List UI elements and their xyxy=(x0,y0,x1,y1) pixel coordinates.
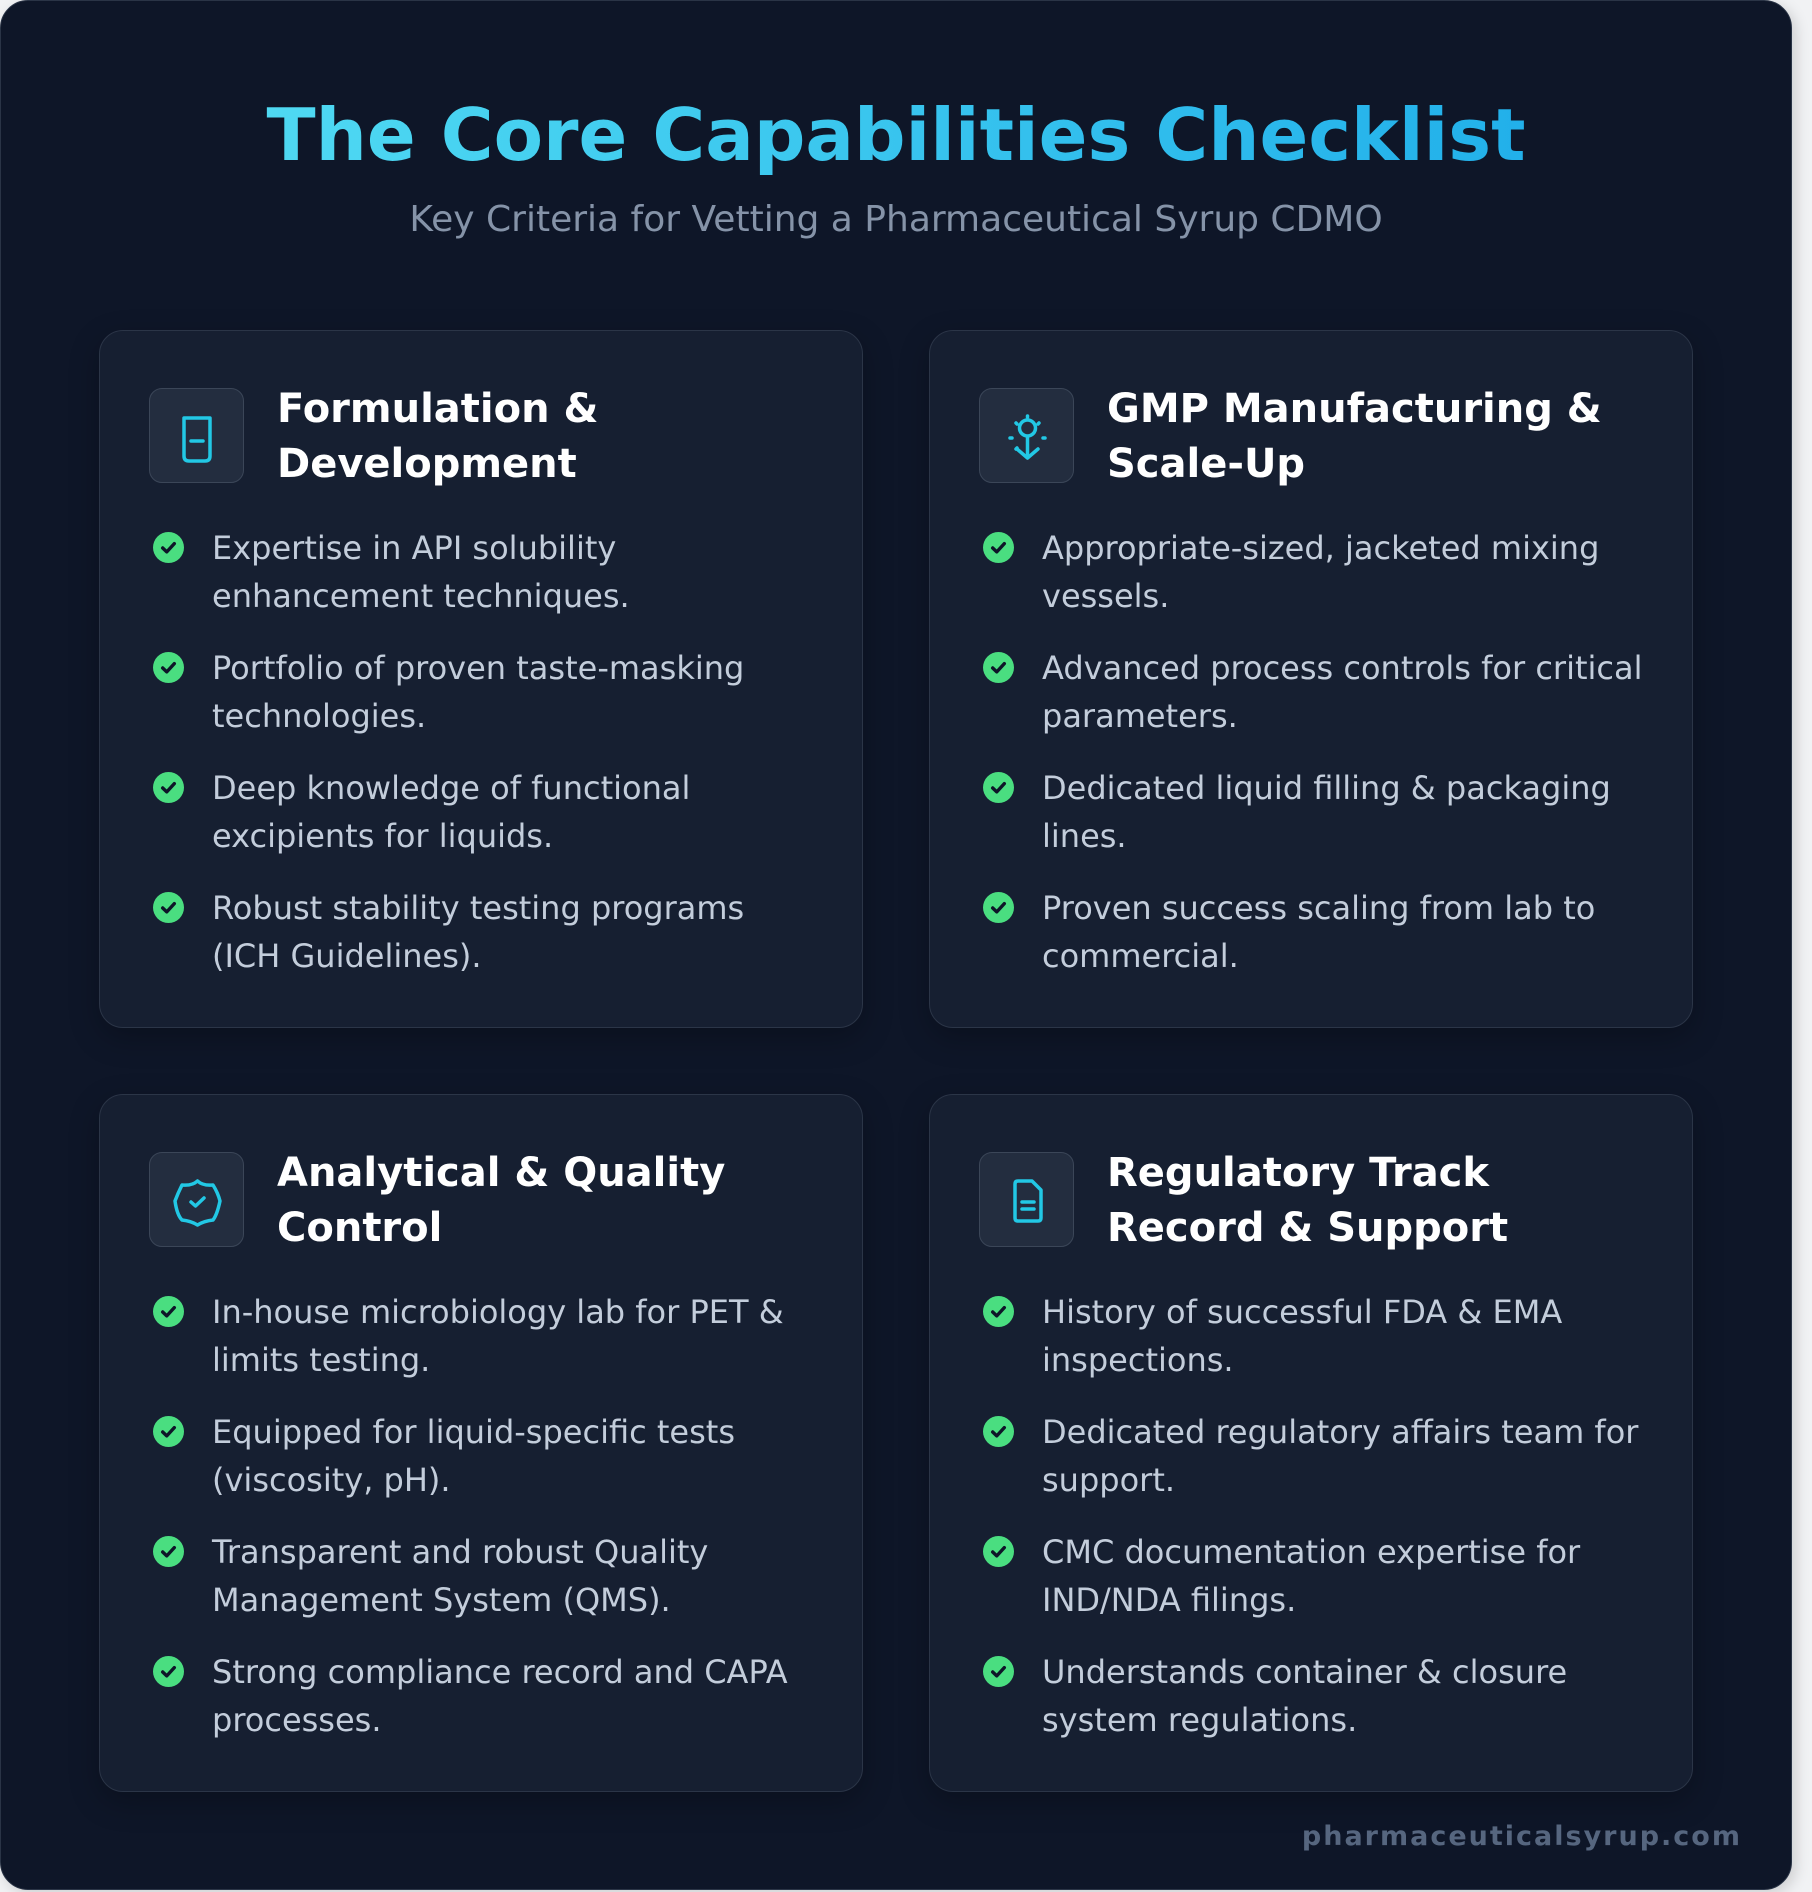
checklist items xyxy=(983,1293,1638,1739)
subtitle: Key Criteria for Vetting a Pharmaceutical Syrup CDMO xyxy=(409,199,1383,240)
icon: beaker xyxy=(149,388,244,483)
checklist items: technologies. xyxy=(212,697,426,735)
checklist items: Advanced process controls for critical xyxy=(1042,649,1642,687)
checklist items: Dedicated liquid filling & packaging xyxy=(1042,769,1611,807)
icon: mixer xyxy=(979,388,1074,483)
checklist items: commercial. xyxy=(1042,937,1239,975)
checklist items: Proven success scaling from lab to xyxy=(1042,889,1595,927)
icon: shield check xyxy=(149,1152,244,1247)
checklist items: (ICH Guidelines). xyxy=(212,937,482,975)
checklist items: parameters. xyxy=(1042,697,1238,735)
checklist items xyxy=(983,529,1642,975)
panel: regulatory track record & support xyxy=(929,1094,1693,1792)
checklist items: support. xyxy=(1042,1461,1175,1499)
checklist items: Deep knowledge of functional xyxy=(212,769,690,807)
heading: Formulation & xyxy=(277,386,598,432)
heading: Regulatory Track xyxy=(1107,1150,1489,1196)
checklist items xyxy=(153,529,744,975)
checklist items: CMC documentation expertise for xyxy=(1042,1533,1580,1571)
checklist items: vessels. xyxy=(1042,577,1169,615)
checklist items: Equipped for liquid-specific tests xyxy=(212,1413,735,1451)
checklist items: limits testing. xyxy=(212,1341,430,1379)
checklist items: Management System (QMS). xyxy=(212,1581,671,1619)
checklist items: lines. xyxy=(1042,817,1127,855)
checklist items: Appropriate-sized, jacketed mixing xyxy=(1042,529,1599,567)
checklist items: History of successful FDA & EMA xyxy=(1042,1293,1562,1331)
checklist items: Robust stability testing programs xyxy=(212,889,744,927)
checklist items: Dedicated regulatory affairs team for xyxy=(1042,1413,1638,1451)
panel: formulation & development xyxy=(99,330,863,1028)
checklist items xyxy=(153,1293,788,1739)
checklist items: processes. xyxy=(212,1701,382,1739)
panel: analytical & quality control xyxy=(99,1094,863,1792)
checklist items: IND/NDA filings. xyxy=(1042,1581,1296,1619)
heading: Development xyxy=(277,441,577,487)
checklist items: excipients for liquids. xyxy=(212,817,553,855)
checklist items: inspections. xyxy=(1042,1341,1234,1379)
panel: GMP manufacturing & scale-up xyxy=(929,330,1693,1028)
heading: GMP Manufacturing & xyxy=(1107,386,1602,432)
heading: Control xyxy=(277,1205,442,1251)
heading xyxy=(277,386,598,487)
heading: Record & Support xyxy=(1107,1205,1508,1251)
heading xyxy=(1107,1150,1508,1251)
checklist items: Expertise in API solubility xyxy=(212,529,616,567)
checklist items: enhancement techniques. xyxy=(212,577,630,615)
title: The Core Capabilities Checklist xyxy=(266,93,1526,177)
checklist items: Strong compliance record and CAPA xyxy=(212,1653,788,1691)
checklist items: system regulations. xyxy=(1042,1701,1357,1739)
heading: Analytical & Quality xyxy=(277,1150,725,1196)
checklist items: Portfolio of proven taste-masking xyxy=(212,649,744,687)
checklist items: Understands container & closure xyxy=(1042,1653,1567,1691)
checklist items: (viscosity, pH). xyxy=(212,1461,451,1499)
heading xyxy=(1107,386,1602,487)
footer: website: pharmaceuticalsyrup.com xyxy=(1302,1821,1742,1852)
checklist items: In-house microbiology lab for PET & xyxy=(212,1293,784,1331)
icon: document xyxy=(979,1152,1074,1247)
checklist items: Transparent and robust Quality xyxy=(212,1533,708,1571)
heading xyxy=(277,1150,725,1251)
heading: Scale-Up xyxy=(1107,441,1305,487)
